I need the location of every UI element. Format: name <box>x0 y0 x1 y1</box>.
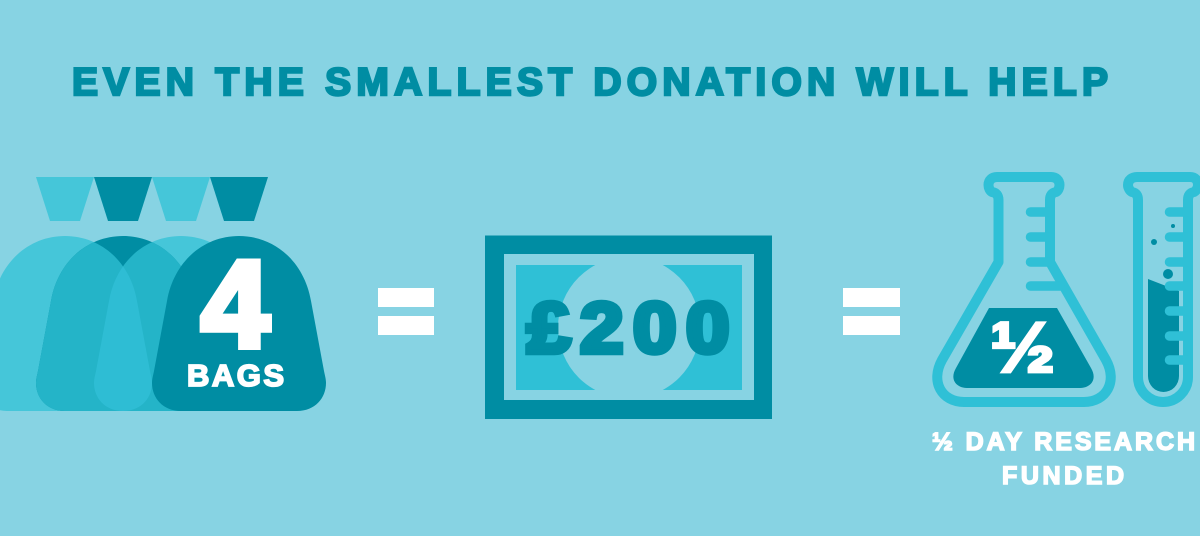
bubbles <box>1151 224 1175 279</box>
amount: £200 <box>527 288 729 368</box>
tube outline <box>1128 177 1198 402</box>
flask liquid <box>953 308 1094 388</box>
bag 2 overlap with bag 1 <box>36 242 123 411</box>
icon: four bags <box>0 177 326 411</box>
bag 2 <box>36 236 210 411</box>
bag 2 overlap with bag 3 <box>123 242 181 411</box>
icon: test tube <box>1128 177 1198 402</box>
caption line 1: ½ DAY RESEARCH <box>932 428 1195 456</box>
tube ticks <box>1170 212 1188 360</box>
icon: flask <box>937 177 1111 402</box>
bag 1 <box>0 236 152 411</box>
caption line 2: FUNDED <box>1002 462 1124 490</box>
bag 3 <box>94 236 268 411</box>
number 4: 4 <box>201 237 269 374</box>
caption <box>932 428 1195 490</box>
flask outline <box>937 177 1111 402</box>
triple overlap <box>94 267 152 411</box>
banknote <box>485 236 772 419</box>
label: bags: BAGS <box>187 358 284 393</box>
note frame <box>485 236 772 419</box>
equals sign 1 <box>378 288 434 335</box>
one half: ½ <box>990 307 1055 387</box>
bag ties <box>36 177 268 221</box>
tube liquid <box>1148 279 1179 392</box>
title: EVEN THE SMALLEST DONATION WILL HELP <box>72 61 1108 104</box>
note panel <box>516 265 742 390</box>
equals sign 2 <box>843 288 900 335</box>
flask ticks <box>1030 212 1060 286</box>
bag 4 <box>152 236 326 411</box>
